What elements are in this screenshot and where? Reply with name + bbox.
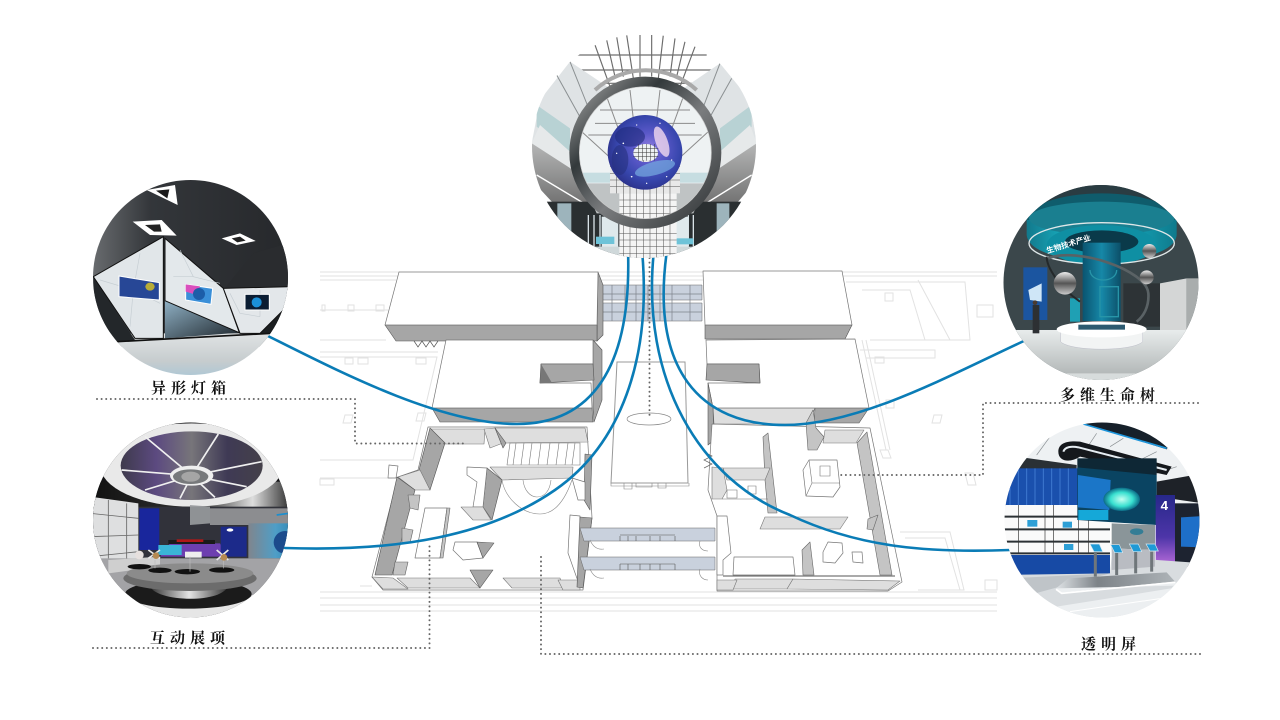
exhibit table (123, 563, 257, 599)
floor plan: ghost base drawing lines (320, 272, 997, 611)
ceiling disc (121, 431, 263, 500)
label: 透明屏: 透明屏 (1081, 636, 1141, 653)
dotted leader: 多维生命树 (838, 403, 1198, 475)
purple panel with number: 4 (1161, 498, 1169, 513)
ceiling canopy (1058, 441, 1172, 475)
label: 异形灯箱: 异形灯箱 (151, 379, 231, 397)
photo circle: interactive exhibit (90, 420, 296, 620)
connector curve: right top circle (664, 250, 1026, 425)
central walkway upper: blue-grey corridors (598, 284, 703, 321)
photo circle: multi-dimensional life tree (1000, 180, 1203, 383)
label: 多维生命树: 多维生命树 (1060, 386, 1160, 404)
floor plan: 3D building model (372, 271, 902, 591)
lower floor: central corridors (580, 528, 715, 580)
floor (1022, 557, 1190, 618)
ceiling structure (1027, 193, 1177, 265)
person (1033, 305, 1039, 333)
connector curve: left bottom circle (285, 250, 644, 549)
purple panel with number (1156, 495, 1200, 566)
inner ring background (580, 87, 711, 184)
building block: mid right (706, 339, 869, 445)
metal ring (574, 82, 716, 224)
building block: upper right (703, 271, 852, 339)
building block: mid left (432, 340, 602, 422)
connector curve: left top circle (268, 250, 628, 424)
building block: upper left (385, 272, 603, 347)
lower floor: left wing walls and rooms (372, 427, 592, 590)
lower hall (547, 202, 743, 262)
connector curve: right bottom circle (652, 250, 1010, 551)
orbit ring and spheres (1047, 244, 1156, 322)
photo circle: shaped light box (90, 177, 293, 380)
white base (1057, 321, 1147, 349)
light box screens (119, 276, 269, 310)
dotted leader: 透明屏 (541, 556, 1200, 654)
side walls (532, 62, 608, 142)
dotted leader: center (648, 258, 650, 419)
central hall (611, 362, 689, 489)
dotted leader: 异形灯箱 (97, 399, 463, 444)
drone and satellite models (135, 539, 228, 572)
tablet stands and counter (1056, 544, 1176, 618)
donut screen (608, 115, 682, 190)
curved sign text: 生物技术产业 (1045, 232, 1092, 255)
shelf wall (1000, 505, 1110, 555)
photo circle: atrium with donut screen (530, 33, 760, 262)
transparent LED screen (1077, 458, 1157, 550)
lower floor: right wing walls and rooms (704, 410, 902, 591)
central tube (1070, 243, 1121, 322)
photo circle: transparent screen (1000, 420, 1207, 623)
label: 互动展项: 互动展项 (150, 629, 230, 647)
ceiling lights (133, 185, 256, 245)
skylight grid (577, 35, 712, 87)
dotted leader: 互动展项 (93, 545, 430, 648)
grid wall (610, 160, 680, 260)
